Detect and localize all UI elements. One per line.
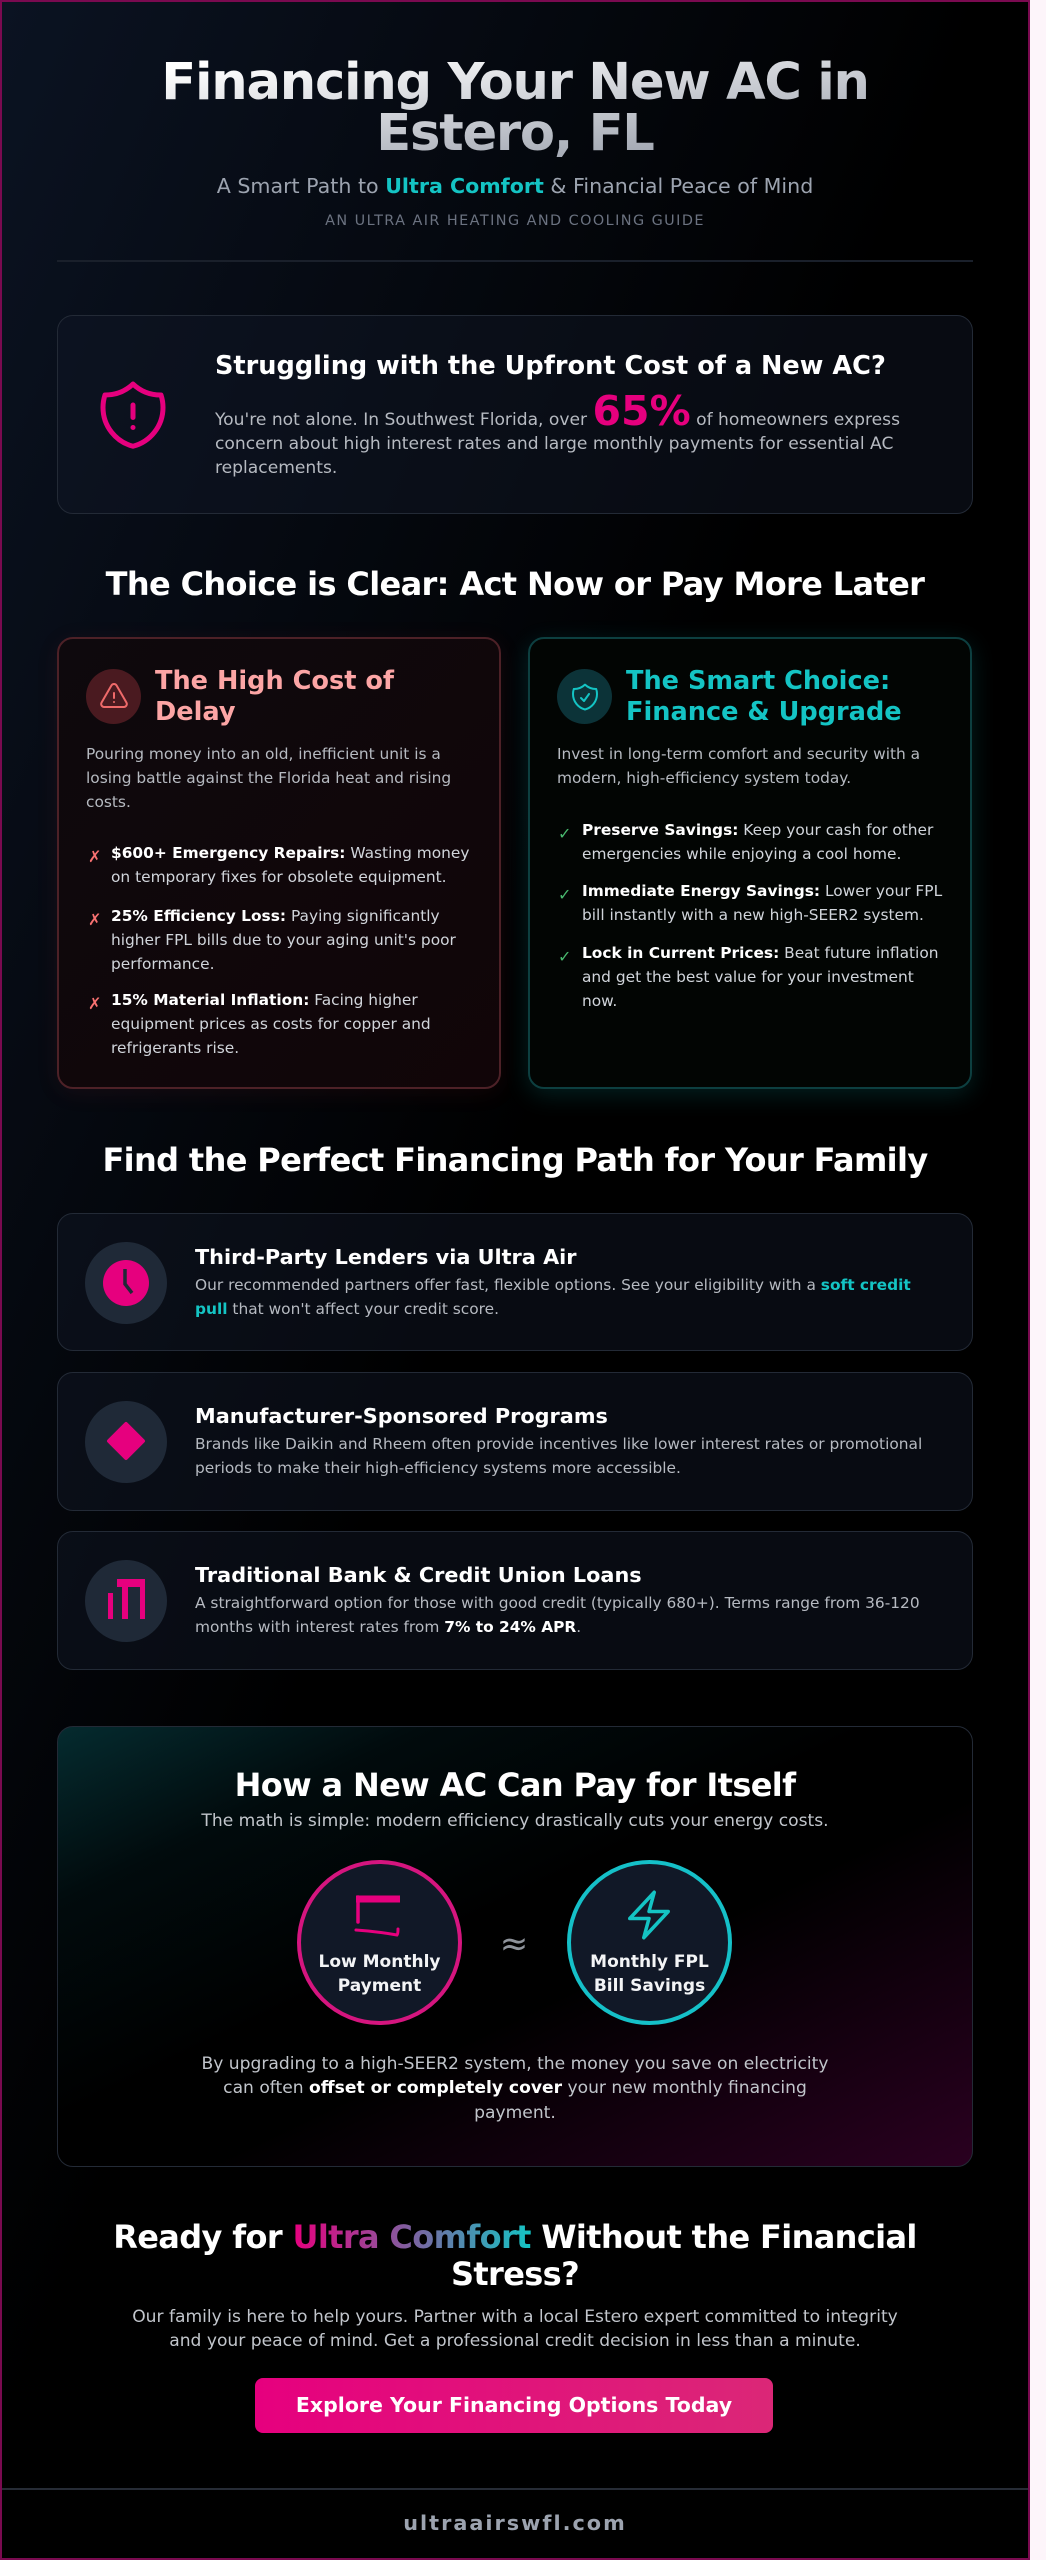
subheading: The math is simple: modern efficiency drastically cuts your energy costs. (201, 1811, 829, 1831)
panel: struggling with cost (57, 315, 973, 514)
panel: pay for itself (57, 1726, 973, 2167)
panel: manufacturer programs (57, 1372, 973, 1511)
icon: bank bars (85, 1560, 167, 1642)
icon: shield check (557, 669, 612, 724)
circle: low monthly payment (297, 1860, 462, 2025)
list item (88, 844, 470, 886)
description (195, 1276, 911, 1318)
heading: Struggling with the Upfront Cost of a New AC? (215, 351, 886, 381)
list item: Immediate Energy Savings: Lower your FPL (582, 882, 942, 900)
heading: The Smart Choice: (626, 666, 890, 696)
list item: bill instantly with a new high-SEER2 system. (582, 906, 924, 924)
list item: ✓ (558, 885, 571, 904)
title: Traditional Bank & Credit Union Loans (195, 1563, 642, 1587)
list item: and get the best value for your investment (582, 968, 914, 986)
paragraph: savings explanation: can often offset or completely cover your new monthly financing (223, 2078, 807, 2098)
panel: third-party lenders (57, 1213, 973, 1351)
description: Pouring money into an old, inefficient unit is a (86, 745, 441, 763)
list item (558, 944, 938, 1010)
call to action heading (113, 2218, 917, 2293)
list item (88, 991, 431, 1057)
body text with statistic (215, 387, 900, 478)
paragraph: savings explanation: payment. (474, 2103, 556, 2123)
label (318, 1952, 440, 1996)
guide label: AN ULTRA AIR HEATING AND COOLING GUIDE (325, 213, 705, 229)
footer url: ultraairswfl.com (403, 2511, 627, 2535)
paragraph: savings explanation (202, 2054, 828, 2123)
list item (88, 907, 456, 973)
list item: refrigerants rise. (111, 1039, 239, 1057)
icon: payment (354, 1895, 400, 1937)
title: Third-Party Lenders via Ultra Air (195, 1245, 577, 1269)
icon: bolt (628, 1890, 670, 1940)
panel: high cost of delay (57, 637, 501, 1089)
icon: shield alert (100, 382, 166, 449)
label: Payment (338, 1976, 421, 1996)
header block (161, 52, 869, 229)
call to action heading: Ready for Ultra Comfort Without the Financial (113, 2218, 917, 2256)
heading (626, 666, 902, 727)
list item: Preserve Savings: Keep your cash for other (582, 821, 933, 839)
list item: higher FPL bills due to your aging unit's poor (111, 931, 456, 949)
description (557, 745, 920, 787)
call to action text (132, 2307, 898, 2351)
label (590, 1952, 709, 1996)
list item: ✓ (558, 947, 571, 966)
paragraph: savings explanation: By upgrading to a high-SEER2 system, the money you save on electricity (202, 2054, 828, 2074)
list item: ✗ (88, 847, 101, 866)
panel: bank loans (57, 1531, 973, 1670)
heading: How a New AC Can Pay for Itself (235, 1766, 795, 1804)
section heading: choice: The Choice is Clear: Act Now or Pay More Later (106, 565, 924, 603)
list item: equipment prices as costs for copper and (111, 1015, 431, 1033)
description: costs. (86, 793, 131, 811)
list item: 25% Efficiency Loss: Paying significantly (111, 907, 440, 925)
label: Monthly FPL (590, 1952, 709, 1972)
description: Our recommended partners offer fast, flexible options. See your eligibility with a soft credit (195, 1276, 911, 1294)
list item: ✗ (88, 910, 101, 929)
label: Low Monthly (318, 1952, 440, 1972)
call to action text: Our family is here to help yours. Partner with a local Estero expert committed to integrity (132, 2307, 898, 2327)
list item (558, 882, 942, 924)
description: modern, high-efficiency system today. (557, 769, 851, 787)
list item: now. (582, 992, 617, 1010)
section heading: financing paths: Find the Perfect Financing Path for Your Family (102, 1141, 928, 1179)
description: A straightforward option for those with good credit (typically 680+). Terms range from 36-120 (195, 1594, 920, 1612)
description (195, 1594, 920, 1636)
description (195, 1435, 922, 1477)
symbol: approximately equal: ≈ (500, 1924, 528, 1964)
list item (558, 821, 934, 863)
call to action text: and your peace of mind. Get a professional credit decision in less than a minute. (169, 2331, 861, 2351)
list item: ✗ (88, 994, 101, 1013)
panel: smart choice (528, 637, 972, 1089)
icon: clock (85, 1242, 167, 1324)
heading: Finance & Upgrade (626, 697, 902, 727)
list item: $600+ Emergency Repairs: Wasting money (111, 844, 470, 862)
button (255, 2378, 773, 2433)
subtitle: A Smart Path to Ultra Comfort & Financial Peace of Mind (217, 174, 813, 198)
heading: Delay (155, 697, 236, 727)
description: losing battle against the Florida heat and rising (86, 769, 451, 787)
list item: 15% Material Inflation: Facing higher (111, 991, 418, 1009)
icon: warning (86, 669, 141, 724)
description: pull that won't affect your credit score. (195, 1300, 499, 1318)
title: Financing Your New AC in (161, 52, 869, 112)
call to action heading: Stress? (451, 2255, 579, 2293)
icon: diamond (85, 1401, 167, 1483)
description: months with interest rates from 7% to 24% APR. (195, 1618, 581, 1636)
description: Brands like Daikin and Rheem often provide incentives like lower interest rates or promotional (195, 1435, 922, 1453)
body text with statistic: replacements. (215, 458, 337, 478)
list item: Lock in Current Prices: Beat future inflation (582, 944, 938, 962)
list item: emergencies while enjoying a cool home. (582, 845, 901, 863)
body text with statistic: You're not alone. In Southwest Florida, over 65% of homeowners express (215, 387, 900, 435)
description (86, 745, 451, 811)
heading (155, 666, 394, 727)
body text with statistic: concern about high interest rates and large monthly payments for essential AC (215, 434, 893, 454)
list item: on temporary fixes for obsolete equipment. (111, 868, 447, 886)
description: periods to make their high-efficiency systems more accessible. (195, 1459, 681, 1477)
description: Invest in long-term comfort and security with a (557, 745, 920, 763)
title: Estero, FL (376, 103, 654, 163)
list item: performance. (111, 955, 214, 973)
heading: The High Cost of (155, 666, 394, 696)
title: Manufacturer-Sponsored Programs (195, 1404, 608, 1428)
button: Explore Your Financing Options Today (296, 2393, 732, 2417)
circle: bill savings (567, 1860, 732, 2025)
list item: ✓ (558, 824, 571, 843)
title (57, 57, 973, 159)
label: Bill Savings (594, 1976, 705, 1996)
